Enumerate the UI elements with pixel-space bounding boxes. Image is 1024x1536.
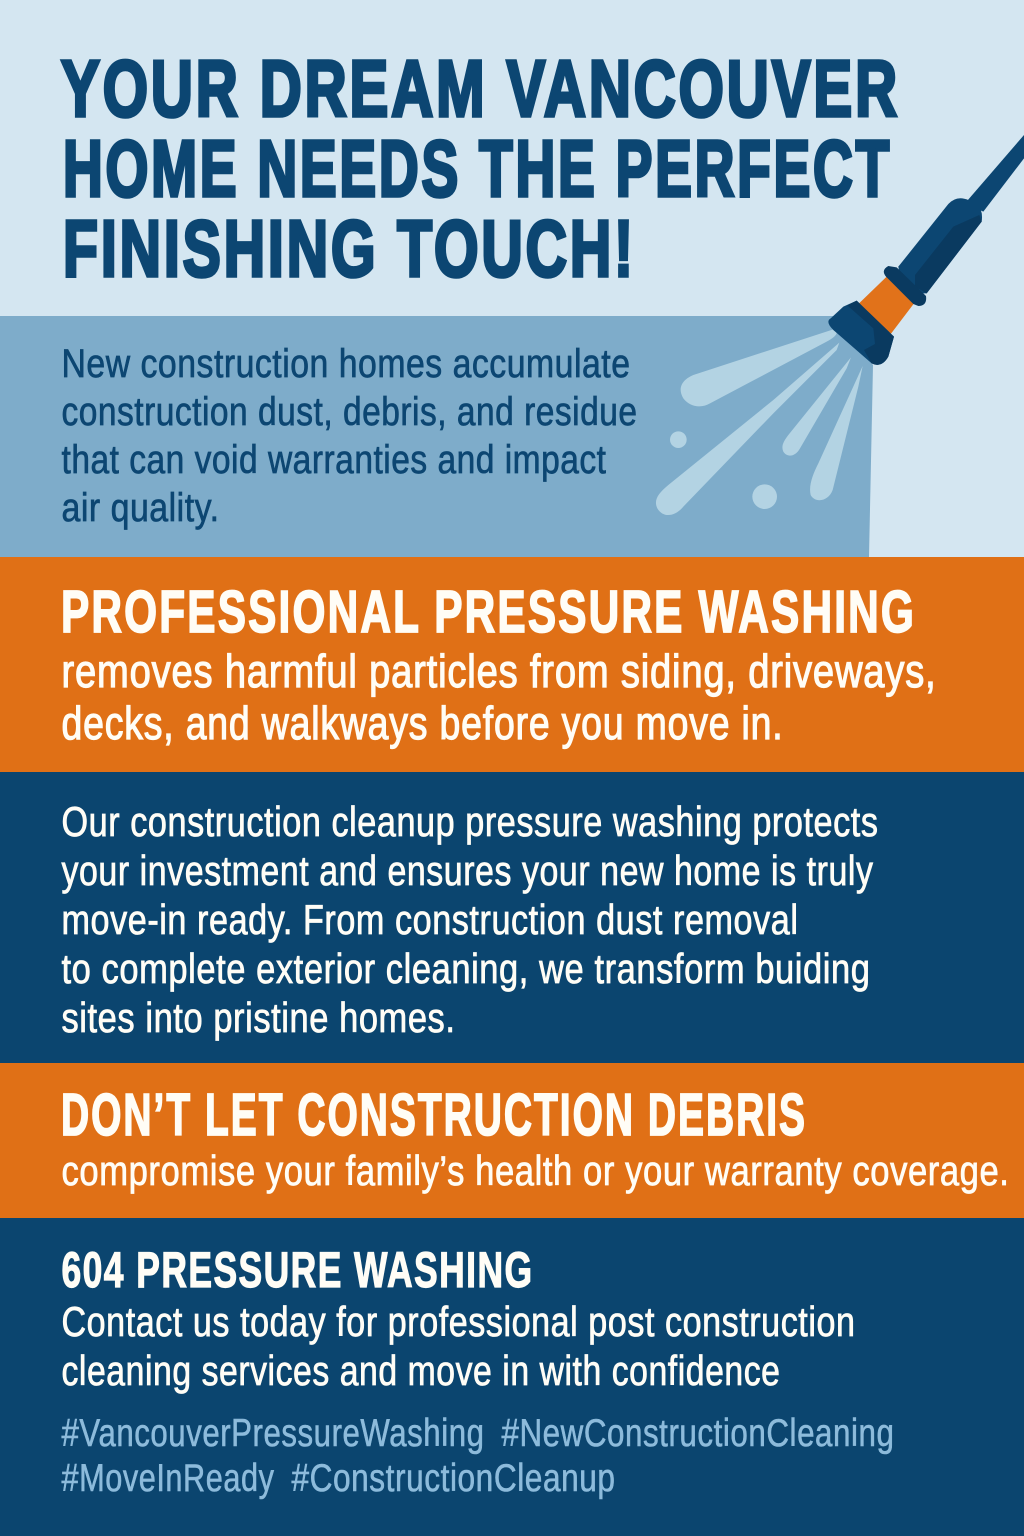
hashtags bbox=[62, 1412, 894, 1500]
icon: collar bbox=[884, 266, 926, 306]
header panel bbox=[0, 0, 1024, 557]
intro text bbox=[62, 342, 638, 530]
hashtags: #MoveInReady bbox=[62, 1457, 274, 1500]
icon: orange coupling bbox=[857, 276, 915, 335]
intro panel background bbox=[0, 316, 873, 557]
panel: contact bbox=[0, 1218, 1024, 1536]
body text bbox=[62, 798, 878, 1041]
company name: 604 PRESSURE WASHING bbox=[62, 1242, 534, 1298]
contact text bbox=[62, 1298, 856, 1394]
body text: move-in ready. From construction dust removal bbox=[62, 896, 798, 943]
panel: construction cleanup bbox=[0, 772, 1024, 1063]
icon: pressure washer wand with spray bbox=[656, 135, 1024, 515]
icon: water spray streams bbox=[656, 329, 863, 515]
hashtags: #NewConstructionCleaning bbox=[502, 1412, 894, 1455]
icon: handle bbox=[898, 198, 982, 293]
icon: hose bbox=[965, 135, 1024, 212]
body text: to complete exterior cleaning, we transform buiding bbox=[62, 945, 870, 992]
intro text: New construction homes accumulate bbox=[62, 342, 630, 386]
body text: sites into pristine homes. bbox=[62, 994, 456, 1041]
title bbox=[61, 44, 900, 293]
hashtags: #ConstructionCleanup bbox=[292, 1457, 616, 1500]
body text: decks, and walkways before you move in. bbox=[62, 697, 784, 749]
contact text: cleaning services and move in with confidence bbox=[62, 1347, 780, 1394]
intro text: construction dust, debris, and residue bbox=[62, 390, 638, 434]
contact text: Contact us today for professional post construction bbox=[62, 1298, 856, 1345]
intro text: that can void warranties and impact bbox=[62, 438, 606, 482]
icon: nozzle bbox=[828, 301, 894, 365]
hashtags: #VancouverPressureWashing bbox=[62, 1412, 484, 1455]
panel: professional pressure washing bbox=[0, 557, 1024, 772]
panel: don't let construction debris bbox=[0, 1063, 1024, 1218]
intro text: air quality. bbox=[62, 486, 220, 530]
title: FINISHING TOUCH! bbox=[63, 204, 636, 293]
body text bbox=[62, 645, 936, 749]
